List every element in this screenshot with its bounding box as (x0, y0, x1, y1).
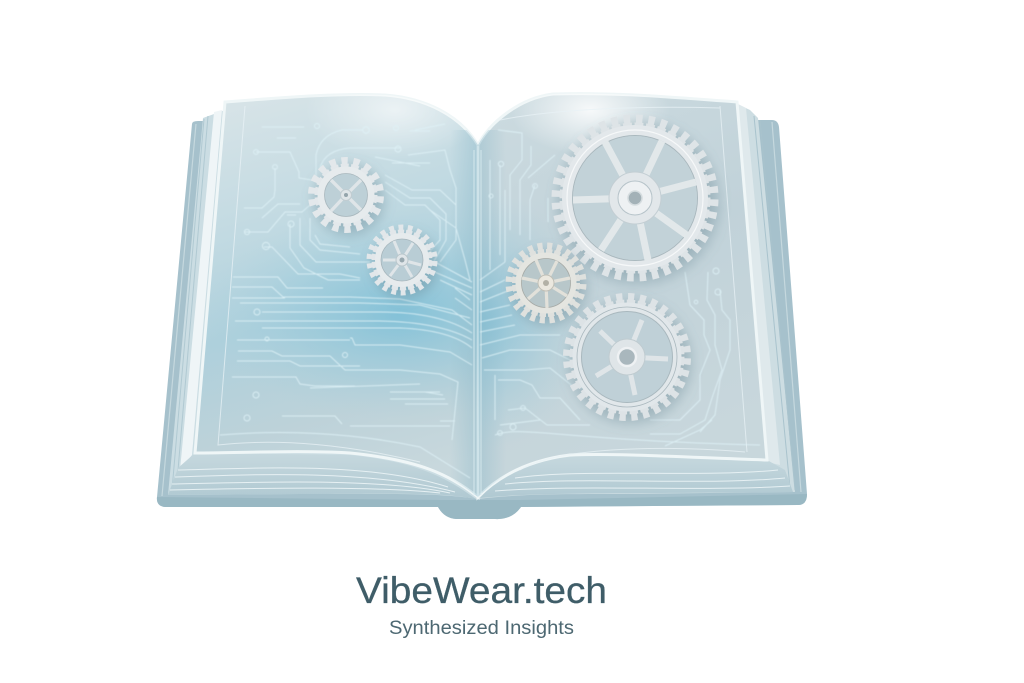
page block left (168, 110, 478, 499)
left page (195, 94, 478, 497)
gear: lower right (567, 297, 687, 417)
right page (478, 94, 767, 497)
gear: top left small (312, 160, 380, 230)
spine (474, 146, 481, 497)
gear: large top right (556, 119, 714, 277)
circuit traces: left page (220, 124, 472, 478)
book (157, 60, 807, 519)
gear: middle beige (509, 246, 583, 320)
page block right (478, 104, 795, 499)
back cover (157, 120, 807, 519)
brand name: VibeWear.tech (356, 570, 607, 611)
page lighting (267, 94, 656, 496)
infographic canvas (156, 92, 807, 638)
circuit traces: right page (480, 130, 760, 446)
tagline: Synthesized Insights (389, 617, 574, 639)
page inner frame lines (218, 106, 747, 470)
gear: center left small (370, 228, 434, 292)
